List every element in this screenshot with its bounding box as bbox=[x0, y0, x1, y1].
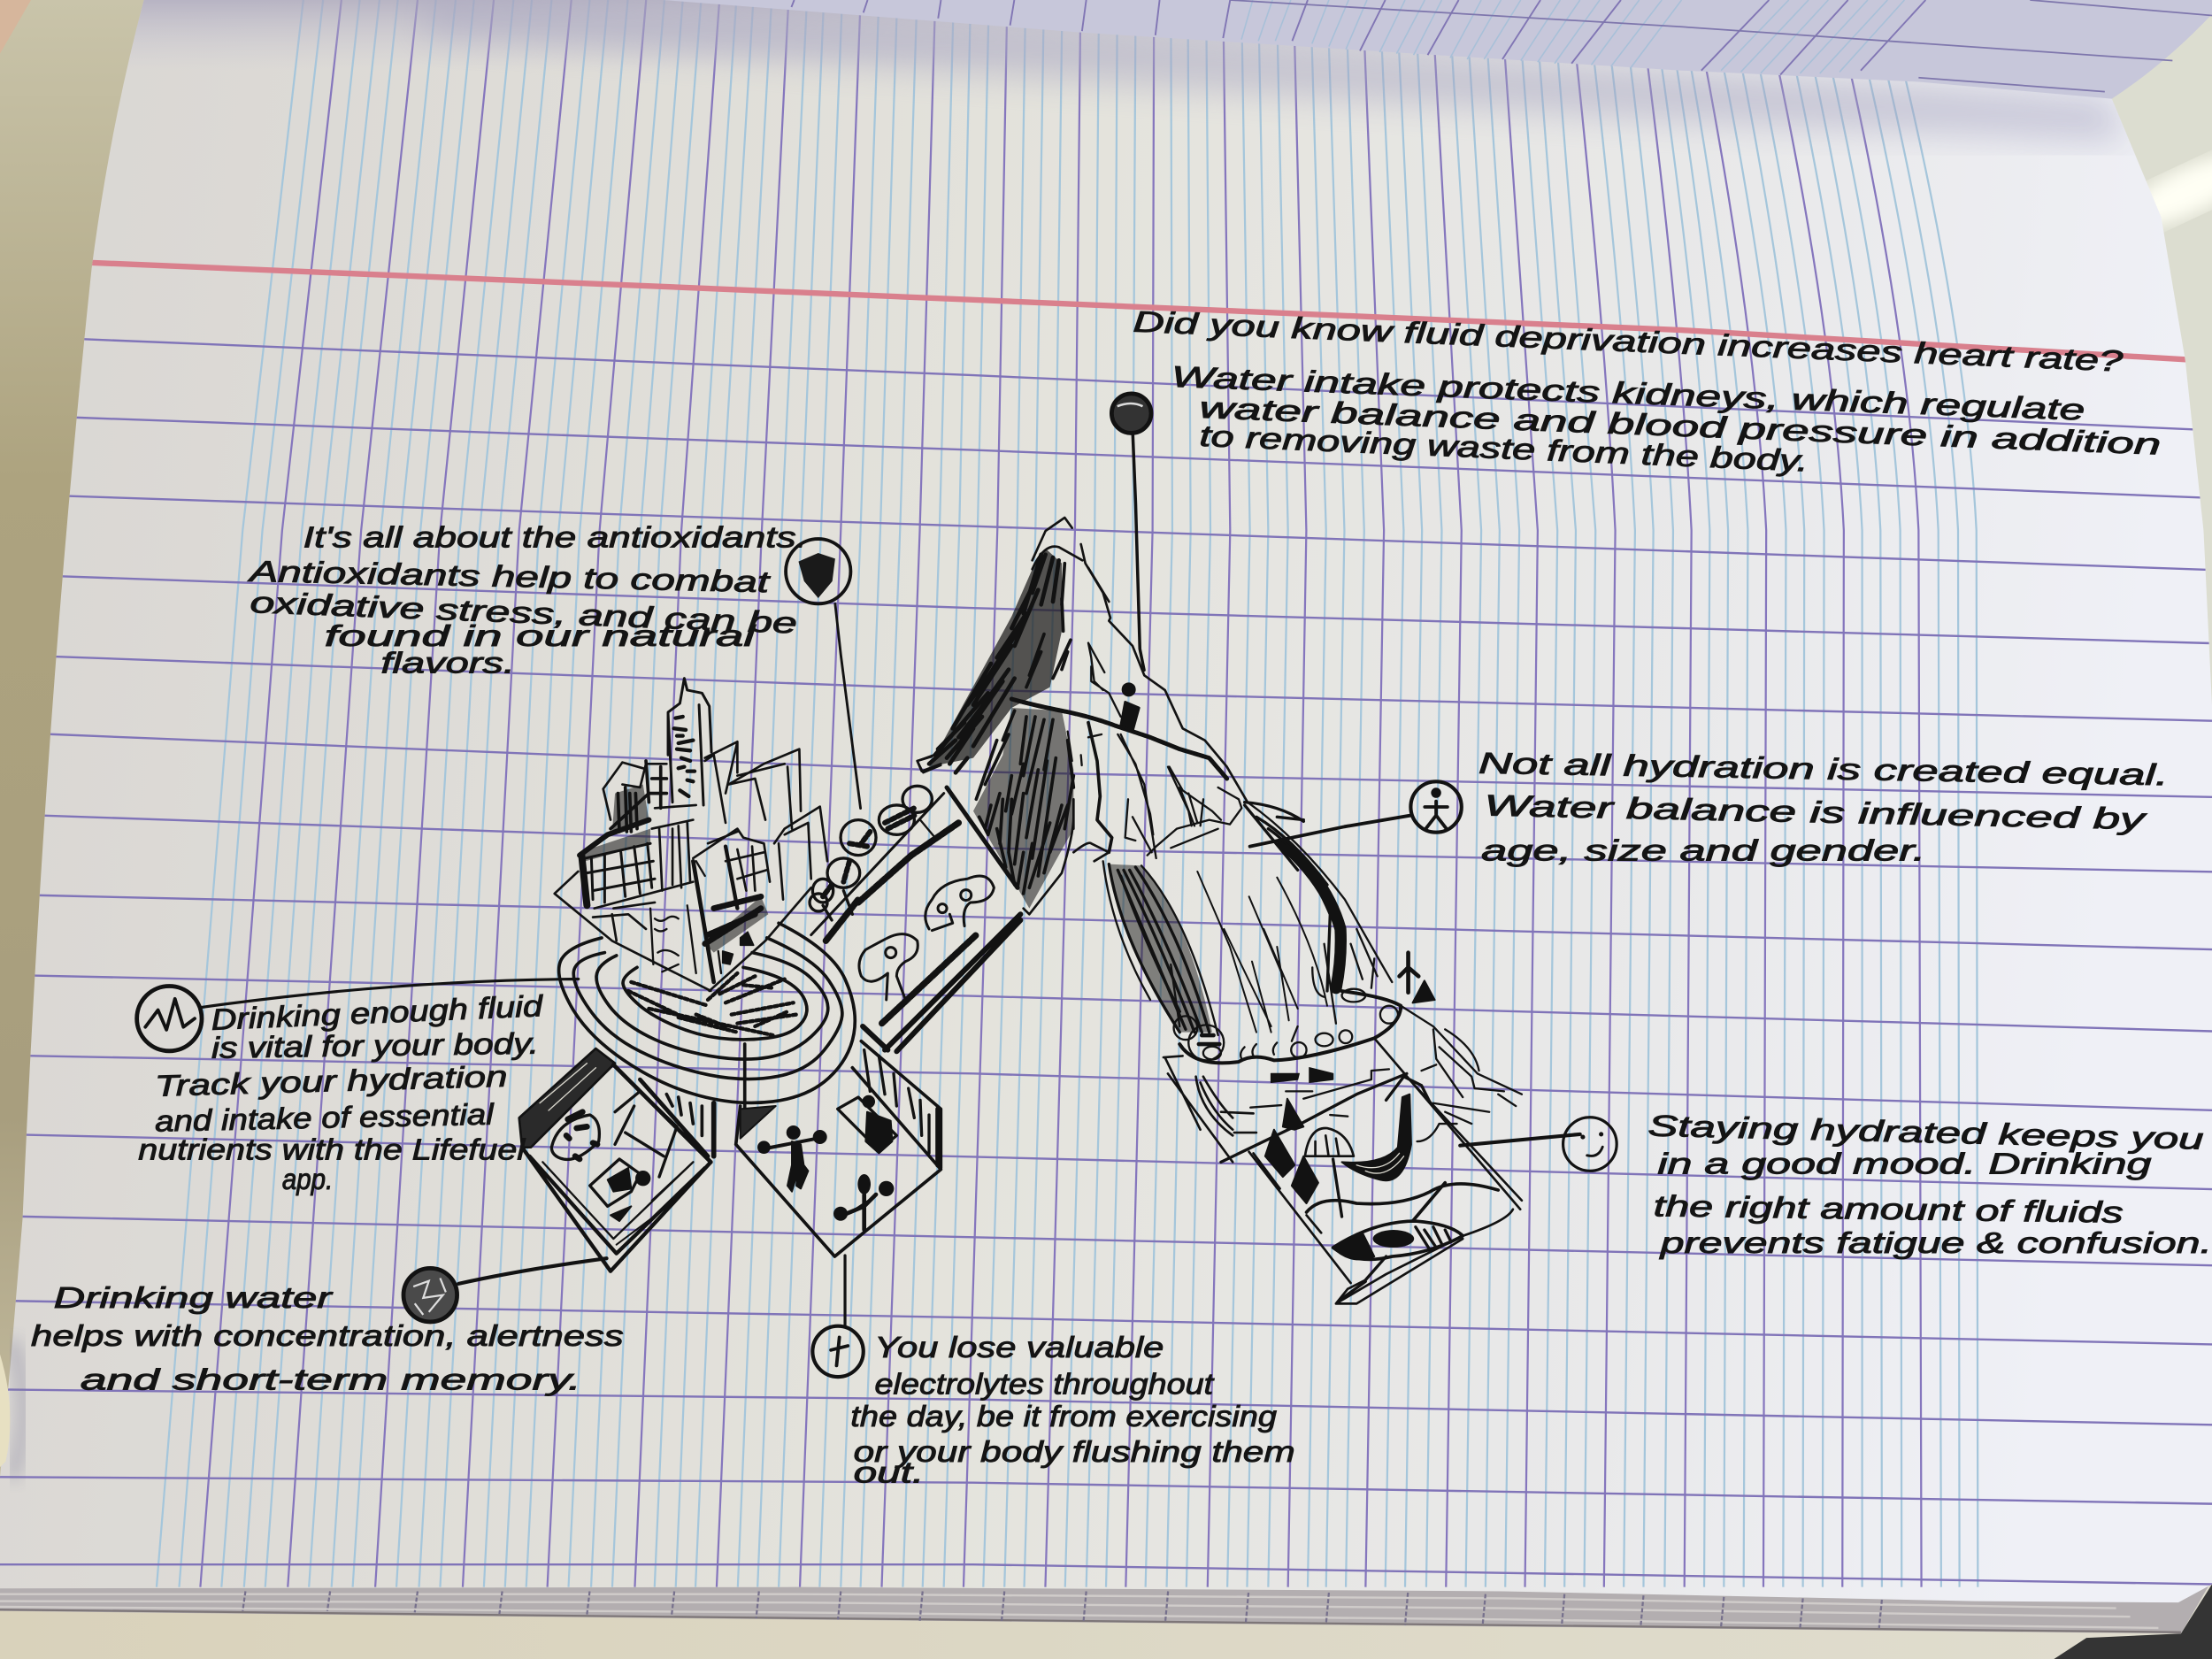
text: antioxidants: It's all about the antioxidants. bbox=[303, 522, 807, 555]
road cross band bbox=[947, 787, 1018, 887]
text: tracking hydration: Drinking enough fluid bbox=[211, 990, 544, 1037]
tree with spirals bbox=[859, 934, 918, 1000]
corner triangle bbox=[741, 1106, 776, 1139]
text: tracking hydration bbox=[138, 990, 544, 1196]
weightlifter figure bbox=[757, 1125, 827, 1192]
river wave bbox=[1307, 1183, 1498, 1221]
city dark underlay bbox=[580, 785, 768, 953]
central water block bbox=[650, 909, 679, 972]
text: fluid deprivation and kidneys: to removing waste from the body. bbox=[1199, 420, 1809, 479]
road edges bbox=[811, 794, 944, 935]
text: fluid deprivation and kidneys: Did you know fluid deprivation increases heart rate? bbox=[1133, 306, 2124, 379]
red margin line bbox=[85, 263, 2189, 360]
chain of stones bbox=[1179, 991, 1401, 1063]
text: tracking hydration: Track your hydration bbox=[155, 1061, 508, 1103]
illustration: city on diamond bbox=[555, 679, 827, 991]
text: fluid deprivation and kidneys bbox=[1133, 306, 2162, 479]
text: water balance: Not all hydration is created equal. bbox=[1479, 748, 2169, 792]
text: antioxidants: oxidative stress, and can be bbox=[250, 587, 797, 641]
text: water balance: age, size and gender. bbox=[1481, 835, 1925, 868]
purple vertical rules bbox=[200, 0, 1922, 1587]
spiral plaza bbox=[590, 1159, 640, 1206]
text: fluid deprivation and kidneys: Water intake protects kidneys, which regulate bbox=[1171, 361, 2085, 427]
pin: strawberry bbox=[786, 539, 861, 809]
hair strokes right bank bbox=[1401, 1006, 1522, 1124]
text: good mood: in a good mood. Drinking bbox=[1657, 1148, 2152, 1181]
hatched band bbox=[519, 1048, 615, 1148]
grid block bbox=[586, 843, 655, 902]
stripes bbox=[864, 1050, 929, 1153]
rope across mountain bbox=[1011, 699, 1227, 779]
text: good mood: Staying hydrated keeps you bbox=[1647, 1110, 2204, 1156]
base lines bbox=[593, 882, 693, 941]
dark left mountain face bbox=[929, 555, 1059, 772]
text: tracking hydration: nutrients with the Lifefuel bbox=[138, 1134, 526, 1167]
text: electrolytes: out. bbox=[854, 1457, 924, 1490]
mushroom bbox=[1305, 1128, 1354, 1156]
speckled park bbox=[628, 973, 796, 1035]
page stack bottom edge bbox=[0, 1580, 2212, 1633]
panel outline bbox=[1164, 1038, 1522, 1283]
text: tracking hydration: and intake of essential bbox=[155, 1099, 495, 1139]
pin: brain bbox=[403, 1258, 607, 1322]
upper sheet curl bbox=[663, 0, 2212, 99]
mountain center strokes bbox=[1068, 643, 1156, 858]
front building bbox=[693, 829, 770, 891]
pin: smile bbox=[1460, 1118, 1617, 1171]
fall ends bbox=[1171, 944, 1374, 1026]
text: concentration: Drinking water bbox=[54, 1282, 334, 1315]
text: concentration: helps with concentration, alertness bbox=[31, 1320, 624, 1353]
text: electrolytes: or your body flushing them bbox=[854, 1436, 1295, 1469]
left waterfall bbox=[1109, 864, 1212, 1033]
text: antioxidants bbox=[247, 522, 807, 680]
tile outline bbox=[522, 1148, 710, 1271]
center post bbox=[740, 1044, 749, 1115]
text: antioxidants: found in our natural bbox=[325, 620, 757, 653]
clustered trees bbox=[810, 786, 932, 920]
illustration: book tile bbox=[519, 1048, 714, 1271]
text: good mood bbox=[1647, 1110, 2212, 1260]
hammock crescent bbox=[1342, 1094, 1411, 1180]
blue vertical rules bbox=[157, 0, 1978, 1587]
right waterfall bbox=[1283, 843, 1340, 988]
small right facet bbox=[1148, 767, 1241, 856]
car bbox=[551, 1115, 599, 1159]
thick roof diagonal bbox=[580, 820, 649, 856]
text: antioxidants: Antioxidants help to combat bbox=[247, 556, 772, 599]
climber figure bbox=[1121, 682, 1139, 732]
tile outline bbox=[736, 1041, 941, 1256]
tree by mountain bbox=[926, 876, 994, 931]
pin: kidneys bbox=[1111, 394, 1151, 670]
text: tracking hydration: is vital for your body. bbox=[211, 1028, 539, 1065]
mountain base outline bbox=[918, 757, 1109, 914]
text: good mood: the right amount of fluids bbox=[1654, 1190, 2124, 1230]
text: antioxidants: flavors. bbox=[380, 648, 515, 680]
text: water balance: Water balance is influenced by bbox=[1484, 790, 2148, 836]
text: fluid deprivation and kidneys: water balance and blood pressure in addition bbox=[1199, 392, 2162, 462]
dark inner hatching bbox=[976, 564, 1073, 894]
rowing machine bbox=[838, 1097, 896, 1150]
text: electrolytes bbox=[850, 1332, 1295, 1490]
text: electrolytes: the day, be it from exercising bbox=[850, 1401, 1277, 1433]
text: electrolytes: electrolytes throughout bbox=[875, 1368, 1215, 1401]
text: concentration bbox=[31, 1282, 624, 1396]
illustration: central oval track bbox=[559, 923, 855, 1115]
tall block bbox=[652, 805, 696, 891]
text: water balance bbox=[1479, 748, 2169, 868]
text: concentration: and short-term memory. bbox=[81, 1363, 581, 1396]
purple horizontal rules bbox=[0, 335, 2212, 1584]
text: electrolytes: You lose valuable bbox=[875, 1332, 1164, 1364]
right buildings bbox=[705, 741, 827, 900]
middle thin falls bbox=[1197, 872, 1327, 1033]
main tower bbox=[668, 679, 711, 805]
tent bbox=[615, 1091, 677, 1177]
pin: electrolytes bbox=[812, 1256, 864, 1377]
illustration: lower right river panel bbox=[1164, 944, 1522, 1303]
mountain ridge outline bbox=[1033, 518, 1248, 803]
text: tracking hydration: app. bbox=[282, 1164, 333, 1196]
octagon building bbox=[603, 763, 666, 820]
illustration: mountain bbox=[918, 518, 1392, 1035]
runner figure bbox=[833, 1174, 894, 1230]
small trees bbox=[1265, 980, 1435, 1203]
dark underlays bbox=[929, 549, 1062, 767]
thumb at left edge bbox=[0, 1340, 24, 1479]
text: good mood: prevents fatigue & confusion. bbox=[1659, 1227, 2212, 1260]
diamond base bbox=[555, 872, 811, 991]
eye bbox=[1333, 1221, 1463, 1259]
illustration: tree road bbox=[810, 754, 1020, 1051]
fish shapes bbox=[1271, 1068, 1333, 1082]
pin: person bbox=[1250, 781, 1462, 847]
pin: heartbeat bbox=[137, 979, 579, 1051]
illustration: gym tile bbox=[736, 1041, 941, 1256]
